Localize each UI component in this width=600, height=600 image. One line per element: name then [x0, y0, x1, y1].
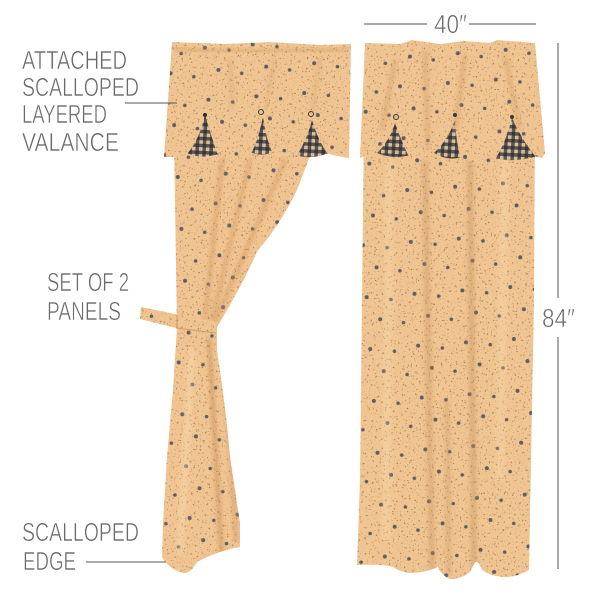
left valance tie knots: [203, 110, 314, 117]
label: attached scalloped layered valance: VALANCE: [22, 127, 119, 157]
left curtain panel, gathered by tieback: [162, 140, 316, 573]
right valance with scalloped edge: [360, 40, 545, 161]
right valance gingham accents: [375, 118, 537, 160]
label: set of 2 panels: SET OF 2: [47, 267, 129, 297]
label: set of 2 panels: PANELS: [47, 296, 121, 326]
label: attached scalloped layered valance: ATTACHED: [22, 45, 127, 75]
label: scalloped edge: [22, 517, 139, 576]
tieback strap: [140, 307, 217, 333]
label: scalloped edge: EDGE: [23, 546, 76, 576]
label: attached scalloped layered valance: SCALLOPED: [22, 72, 139, 102]
label: attached scalloped layered valance: [22, 45, 139, 157]
height dimension: 84 inches: 84″: [542, 303, 575, 333]
width dimension: 40 inches: 40″: [434, 9, 467, 39]
label: attached scalloped layered valance: LAYERED: [22, 99, 107, 129]
label: set of 2 panels: [47, 267, 129, 326]
right curtain panel: [357, 120, 535, 579]
left valance gingham accents: [185, 115, 329, 157]
label: scalloped edge: SCALLOPED: [22, 517, 139, 547]
leader line: scalloped edge: [86, 561, 166, 563]
right valance tie knots: [394, 113, 514, 120]
left valance with scalloped edge: [164, 42, 351, 158]
leader line: valance: [125, 102, 177, 104]
